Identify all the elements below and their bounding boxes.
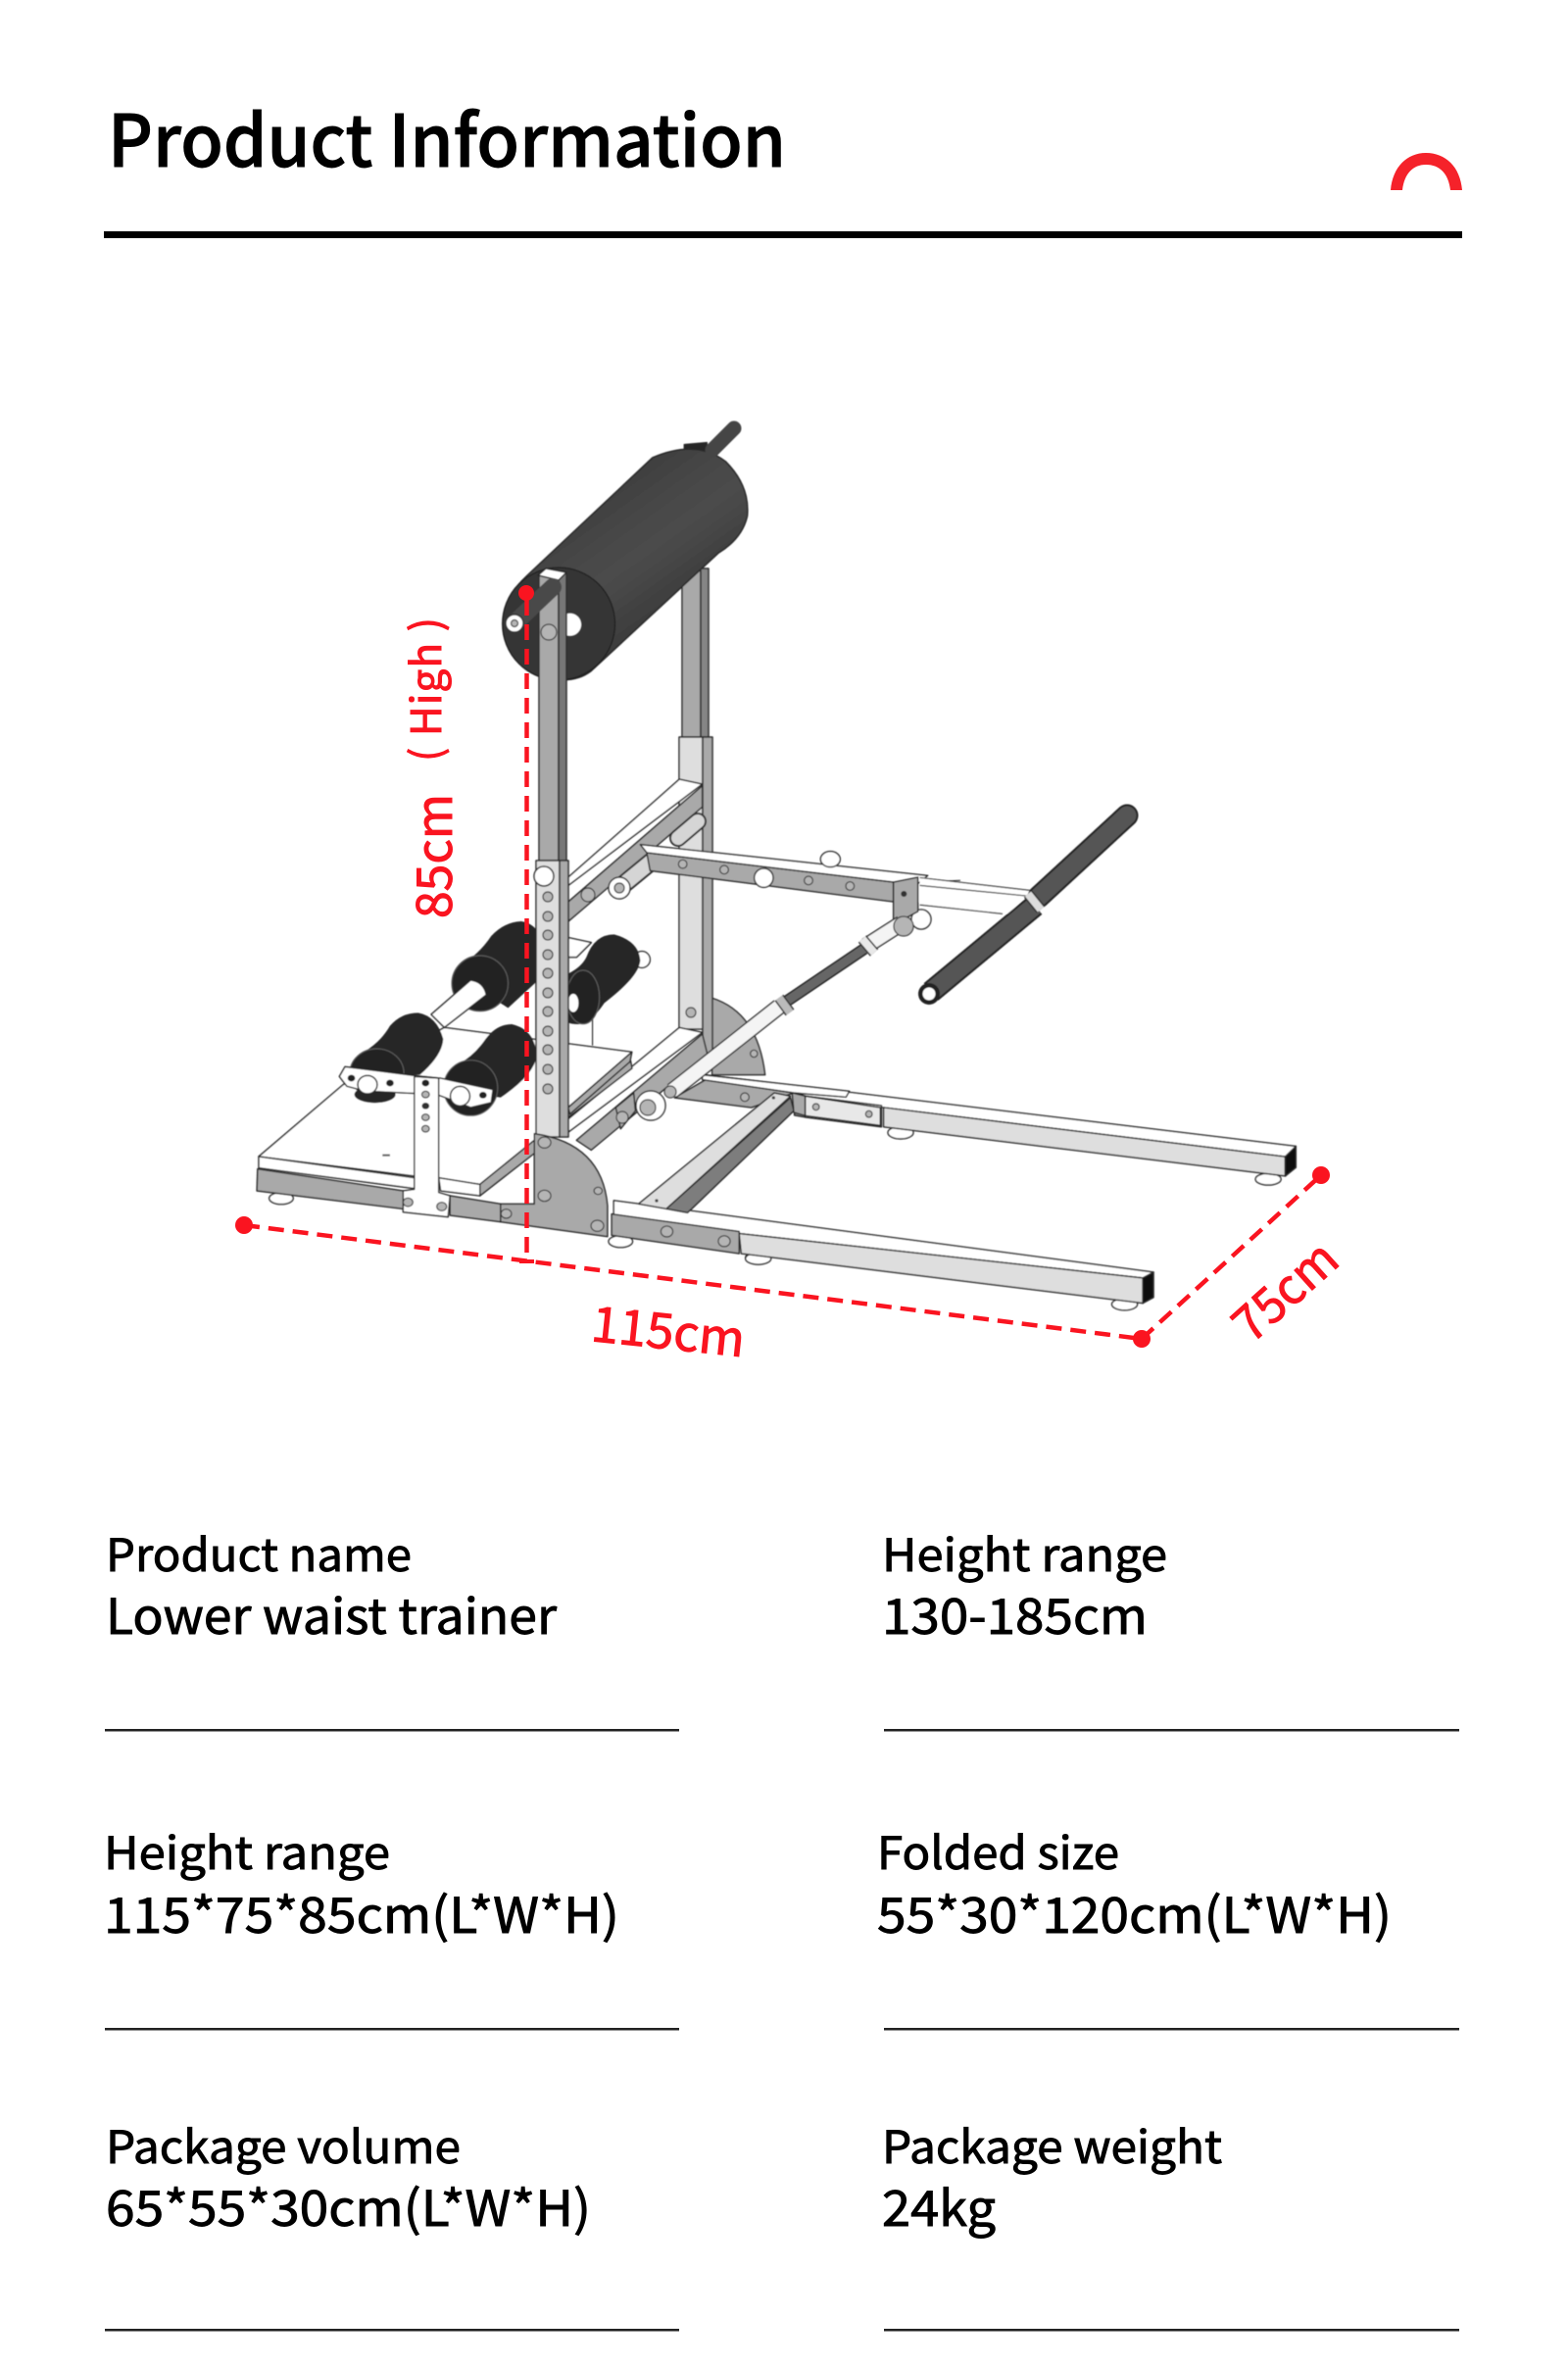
pad front axle and bolt — [506, 587, 553, 632]
rear quarter plate and beam — [674, 998, 850, 1108]
spec: height range: 130-185cm — [882, 1578, 1148, 1649]
foot roller bracket with adjustment plate — [339, 1066, 493, 1217]
spec: folded size: Folded size — [877, 1818, 1119, 1883]
spec: package volume: Package volume — [106, 2112, 461, 2177]
dimension: width 75cm — [1133, 1166, 1351, 1356]
front quarter plate — [501, 1134, 608, 1237]
spec: folded size — [877, 1818, 1459, 2031]
dimension: height 85cm: 85cm — [396, 794, 466, 918]
spec: folded size: 55*30*120cm(L*W*H) — [877, 1877, 1392, 1948]
product illustration: lower waist trainer — [257, 428, 1296, 1310]
gas strut — [616, 916, 913, 1123]
spec: package weight: 24kg — [882, 2170, 996, 2241]
spec: height range — [882, 1520, 1459, 1731]
dimension: width 75cm: 75cm — [1214, 1222, 1351, 1356]
spec: product name: Lower waist trainer — [106, 1578, 558, 1649]
spec: overall dimensions: 115*75*85cm(L*W*H) — [104, 1877, 619, 1948]
handle crossbar support — [920, 877, 1030, 913]
rear wheel at arm end — [911, 910, 931, 929]
spec: height range: Height range — [882, 1520, 1167, 1585]
dimension: height 85cm: ( High ) — [394, 617, 454, 762]
right foot roller — [566, 934, 650, 1024]
title: Product Information — [108, 84, 786, 188]
spec: product name: Product name — [106, 1520, 412, 1585]
foot rollers — [350, 921, 542, 1115]
spec: package weight: Package weight — [882, 2112, 1222, 2177]
front upright post — [534, 568, 568, 1137]
spec: overall dimensions — [104, 1818, 679, 2031]
handlebar — [918, 815, 1127, 1005]
front leg rail — [612, 1201, 1153, 1310]
rear leg — [703, 1074, 1296, 1185]
pad axle end — [712, 428, 734, 450]
dimension: length 115cm — [235, 1216, 1142, 1371]
handle arm beam — [640, 845, 960, 924]
icon: red arc — [1391, 153, 1462, 190]
dimension: length 115cm: 115cm — [588, 1285, 749, 1371]
rear upright post — [679, 568, 712, 1056]
upper pivot tubes — [581, 821, 698, 902]
spec: product name — [105, 1520, 679, 1731]
spec: package volume — [105, 2112, 679, 2331]
frame cross members — [568, 779, 708, 1150]
spec: package weight — [882, 2112, 1459, 2331]
back pad roller — [503, 443, 748, 680]
cross brace — [615, 1093, 880, 1212]
dimension: height 85cm — [394, 585, 534, 1261]
foot platform — [257, 1017, 769, 1263]
spec: package volume: 65*55*30cm(L*W*H) — [106, 2170, 591, 2241]
spec: overall dimensions: Height range — [104, 1818, 390, 1883]
